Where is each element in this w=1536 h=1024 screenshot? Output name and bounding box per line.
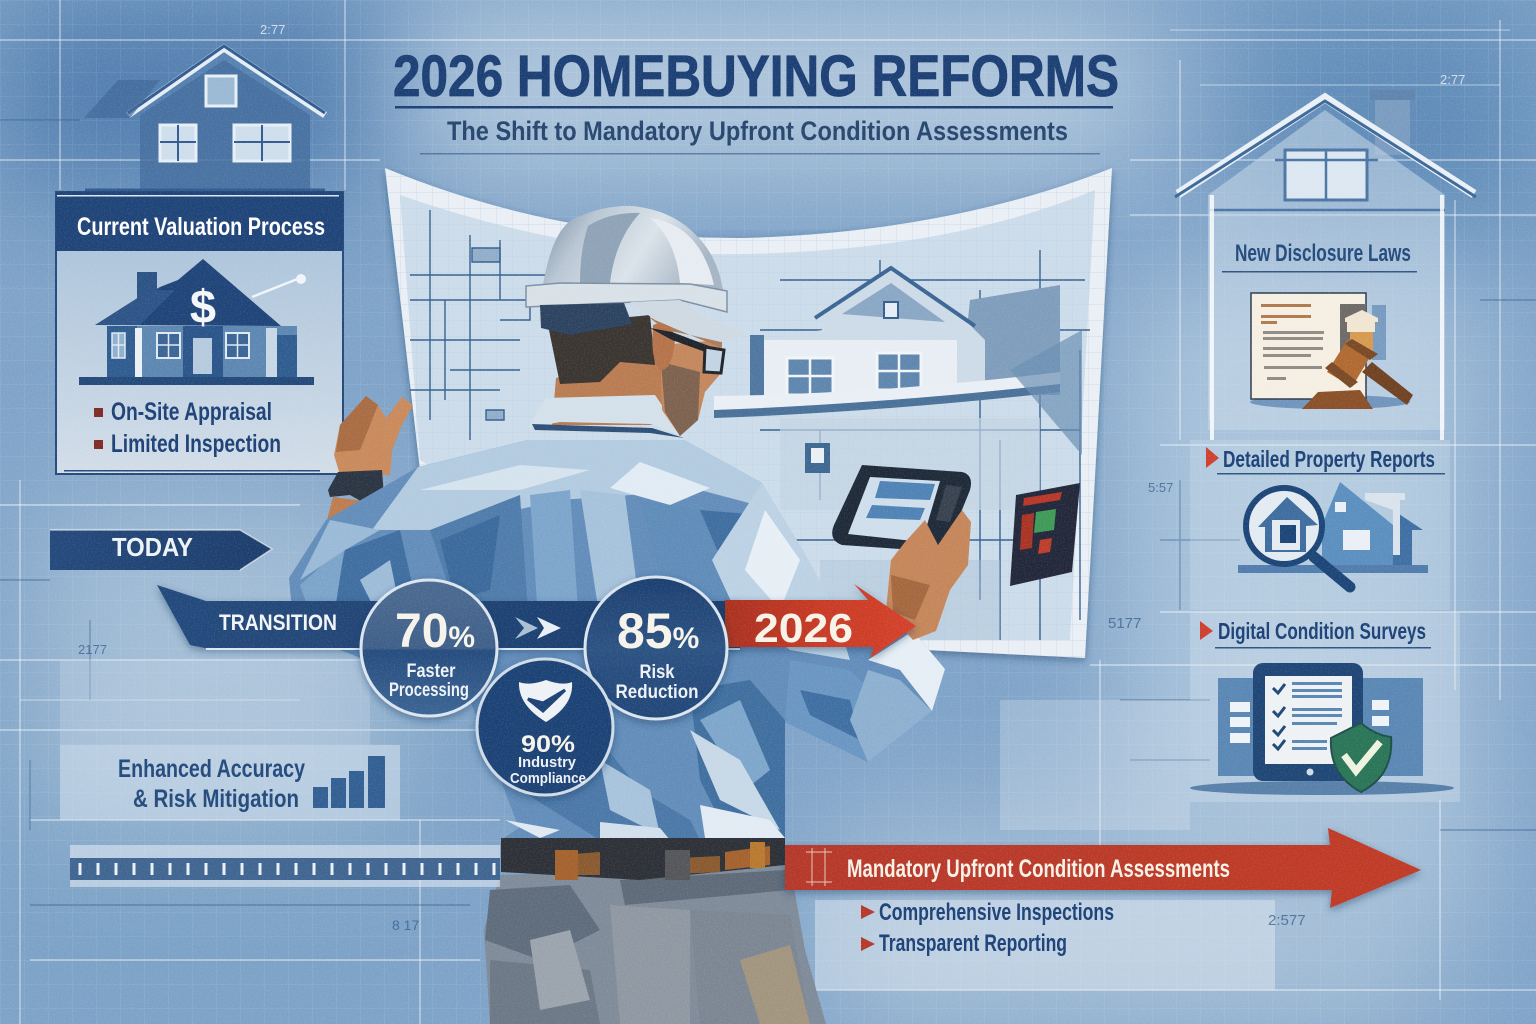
bullets: appraisal and inspection (94, 398, 281, 458)
icon: top-right house (1175, 90, 1476, 440)
enhanced accuracy text: & Risk Mitigation (133, 785, 299, 813)
tablet (832, 465, 971, 552)
dimension numbers: 5:57 (1148, 480, 1173, 495)
icon: house with dollar sign: $ (190, 280, 216, 333)
bullets: appraisal and inspection: Limited Inspection (111, 430, 281, 458)
heading: new disclosure laws: New Disclosure Laws (1235, 240, 1411, 267)
transition ribbon: TRANSITION (219, 610, 337, 635)
belt (501, 838, 785, 880)
stat: 90% industry compliance: Compliance (510, 770, 586, 787)
stat: 90% industry compliance (477, 659, 613, 795)
dimension numbers: 2:577 (1268, 912, 1306, 929)
icon: house with dollar sign (79, 259, 314, 385)
transition ribbon (157, 585, 740, 649)
panel: current valuation process (56, 192, 343, 474)
arrow: 2026: 2026 (754, 605, 853, 651)
arrow: 2026 (725, 584, 916, 658)
neck, collar and head (528, 315, 725, 438)
stat: 85% risk reduction: Reduction (616, 682, 698, 703)
TODAY arrow (50, 530, 272, 570)
bullets: inspections and reporting: Transparent Reporting (879, 930, 1067, 957)
dimension numbers: 2:77 (1440, 72, 1465, 87)
enhanced accuracy text (118, 755, 305, 813)
arrow: mandatory upfront condition assessments (785, 828, 1421, 908)
paper blueprint (385, 168, 1112, 658)
left arm and hand (326, 396, 413, 528)
stat: 90% industry compliance: 90% (521, 731, 575, 758)
stat: 85% risk reduction: Risk (640, 662, 675, 683)
icon: shield check (519, 680, 572, 722)
blueprint line drawing (410, 210, 1090, 640)
icon: top-left house (84, 46, 325, 190)
blueprint house drawing (714, 267, 1082, 640)
icon: tablet checklist and shield (1190, 663, 1454, 795)
dimension numbers: 2:77 (260, 22, 285, 37)
enhanced accuracy text: Enhanced Accuracy (118, 755, 305, 783)
dimension numbers: 8 17 (392, 917, 419, 933)
trousers (484, 865, 826, 1024)
icon: magnifier and house (1238, 482, 1428, 587)
red device (1010, 483, 1080, 586)
heading: digital condition surveys (1200, 618, 1431, 648)
panel heading (56, 192, 343, 251)
stat: 85% risk reduction: 85% (617, 603, 699, 659)
title: 2026 HOMEBUYING REFORMS (393, 44, 1119, 109)
bar chart (313, 756, 385, 808)
bullets: inspections and reporting (861, 899, 1114, 957)
right hand (886, 510, 971, 640)
arrow: mandatory upfront condition assessments: Mandatory Upfront Condition Assessments (847, 855, 1230, 883)
panel heading: Current Valuation Process (77, 213, 325, 241)
stat: 70% faster processing: 70% (395, 605, 475, 658)
TODAY arrow: TODAY (112, 532, 193, 562)
stat: 90% industry compliance: Industry (518, 754, 577, 771)
arrows between stats (515, 617, 561, 639)
icon: document and gavel (1250, 293, 1413, 409)
shirt (289, 440, 945, 840)
heading: detailed property reports (1206, 446, 1445, 474)
ruler strip (70, 845, 500, 887)
subtitle: The Shift to Mandatory Upfront Condition Assessments (447, 116, 1068, 146)
heading: detailed property reports: Detailed Property Reports (1223, 446, 1435, 472)
worker figure (289, 206, 1080, 1024)
dimension numbers: 2177 (78, 642, 107, 657)
hard hat (526, 206, 747, 342)
stat: 70% faster processing: Processing (389, 680, 469, 701)
dimension numbers: 5177 (1108, 615, 1141, 632)
stat: 70% faster processing (361, 580, 497, 716)
bullets: inspections and reporting: Comprehensive Inspections (879, 899, 1114, 926)
stat: 85% risk reduction (585, 577, 727, 719)
bullets: appraisal and inspection: On-Site Appraisal (111, 398, 272, 426)
stat: 70% faster processing: Faster (406, 661, 456, 682)
heading: digital condition surveys: Digital Condition Surveys (1218, 618, 1426, 644)
